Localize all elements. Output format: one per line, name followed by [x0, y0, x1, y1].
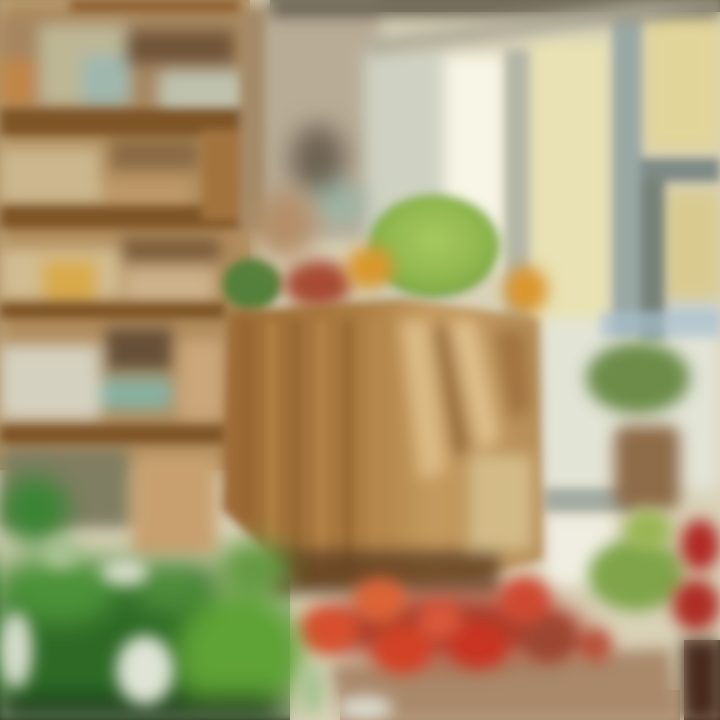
right side plant and vase	[586, 342, 720, 720]
background figure	[290, 124, 366, 225]
crate of tomatoes	[298, 576, 680, 720]
foreground green leaves and white flowers	[0, 476, 393, 720]
produce on top of bag	[222, 190, 548, 314]
left shelves with products	[0, 0, 265, 555]
paper grocery bag	[222, 298, 544, 595]
icon: green lettuce	[368, 194, 500, 298]
